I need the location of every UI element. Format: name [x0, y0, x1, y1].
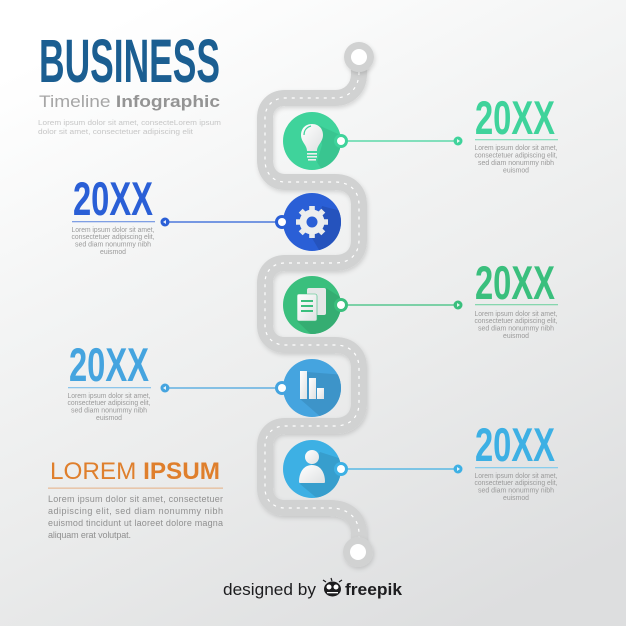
winding road [265, 57, 359, 552]
label: 20XX left 2: Lorem ipsum dolor sit amet, [68, 393, 151, 400]
label: 20XX left 1 [72, 172, 155, 256]
intro text: Lorem ipsum dolor sit amet, consecteLorem ipsum [38, 118, 221, 127]
label: 20XX right 2: Lorem ipsum dolor sit amet, [474, 311, 558, 318]
label: 20XX right 2: consectetuer adipiscing elit, [474, 318, 558, 325]
label: 20XX left 2: euismod [96, 415, 122, 422]
label: 20XX right 3: euismod [503, 495, 529, 502]
label: 20XX right 1: 20XX [475, 91, 555, 144]
step 5: person [283, 440, 462, 498]
icon: freepik logo [323, 578, 342, 596]
footer credit: freepik [345, 580, 403, 599]
label: 20XX right 3: consectetuer adipiscing elit, [474, 480, 558, 487]
label: 20XX left 2: 20XX [69, 338, 149, 391]
icon: gear [296, 206, 328, 238]
icon: lightbulb [301, 124, 323, 161]
body text: aliquam erat volutpat. [48, 530, 131, 540]
label: 20XX right 1: Lorem ipsum dolor sit amet, [474, 145, 558, 152]
label: 20XX left 2: consectetuer adipiscing elit, [68, 400, 151, 407]
label: 20XX left 1: euismod [100, 249, 126, 256]
end node [454, 136, 462, 146]
body text: adipiscing elit, sed diam nonummy nibh [48, 506, 223, 516]
label: 20XX left 2 [68, 338, 151, 422]
label: 20XX left 1: Lorem ipsum dolor sit amet, [72, 227, 155, 234]
label: 20XX right 3 [474, 418, 558, 502]
label: 20XX left 1: consectetuer adipiscing elit, [72, 234, 155, 241]
footer credit [223, 578, 403, 599]
step 1: lightbulb [283, 112, 462, 175]
label: 20XX left 2: sed diam nonummy nibh [71, 408, 147, 414]
end node [454, 300, 462, 310]
label: 20XX right 3: 20XX [475, 418, 555, 471]
subtitle: Timeline Infographic [39, 92, 220, 111]
step 4: bar chart [160, 359, 341, 417]
label: 20XX right 2 [474, 256, 558, 340]
end node [160, 384, 170, 392]
label: 20XX right 1: sed diam nonummy nibh [478, 160, 554, 167]
heading: LOREM IPSUM [50, 458, 220, 485]
label: 20XX right 3: sed diam nonummy nibh [478, 488, 554, 494]
intro text: dolor sit amet, consectetuer adipiscing elit [38, 127, 194, 136]
step 3: documents [283, 276, 462, 334]
road end marker [343, 537, 373, 567]
title: BUSINESS [39, 27, 220, 95]
label: 20XX left 1: sed diam nonummy nibh [75, 242, 151, 248]
footer credit: designed by [223, 581, 317, 599]
label: 20XX right 2: euismod [503, 333, 529, 340]
label: 20XX left 1: 20XX [73, 172, 153, 225]
road start marker [344, 42, 374, 72]
label: 20XX right 3: Lorem ipsum dolor sit amet, [474, 473, 558, 480]
lorem ipsum panel [48, 458, 223, 540]
body text: euismod tincidunt ut laoreet dolore magna [48, 518, 223, 528]
end node [160, 218, 170, 226]
body text [48, 494, 223, 540]
icon: bar chart [300, 371, 324, 399]
label: 20XX right 2: sed diam nonummy nibh [478, 326, 554, 332]
label: 20XX right 1: euismod [503, 168, 529, 174]
step 2: gear [160, 193, 345, 255]
body text: Lorem ipsum dolor sit amet, consectetuer [48, 494, 223, 504]
label: 20XX right 1: consectetuer adipiscing elit, [474, 152, 558, 160]
intro text [38, 118, 221, 136]
label: 20XX right 2: 20XX [475, 256, 555, 309]
icon: person [299, 450, 325, 483]
label: 20XX right 1 [474, 91, 558, 174]
icon: documents [297, 288, 326, 321]
end node [454, 464, 462, 474]
